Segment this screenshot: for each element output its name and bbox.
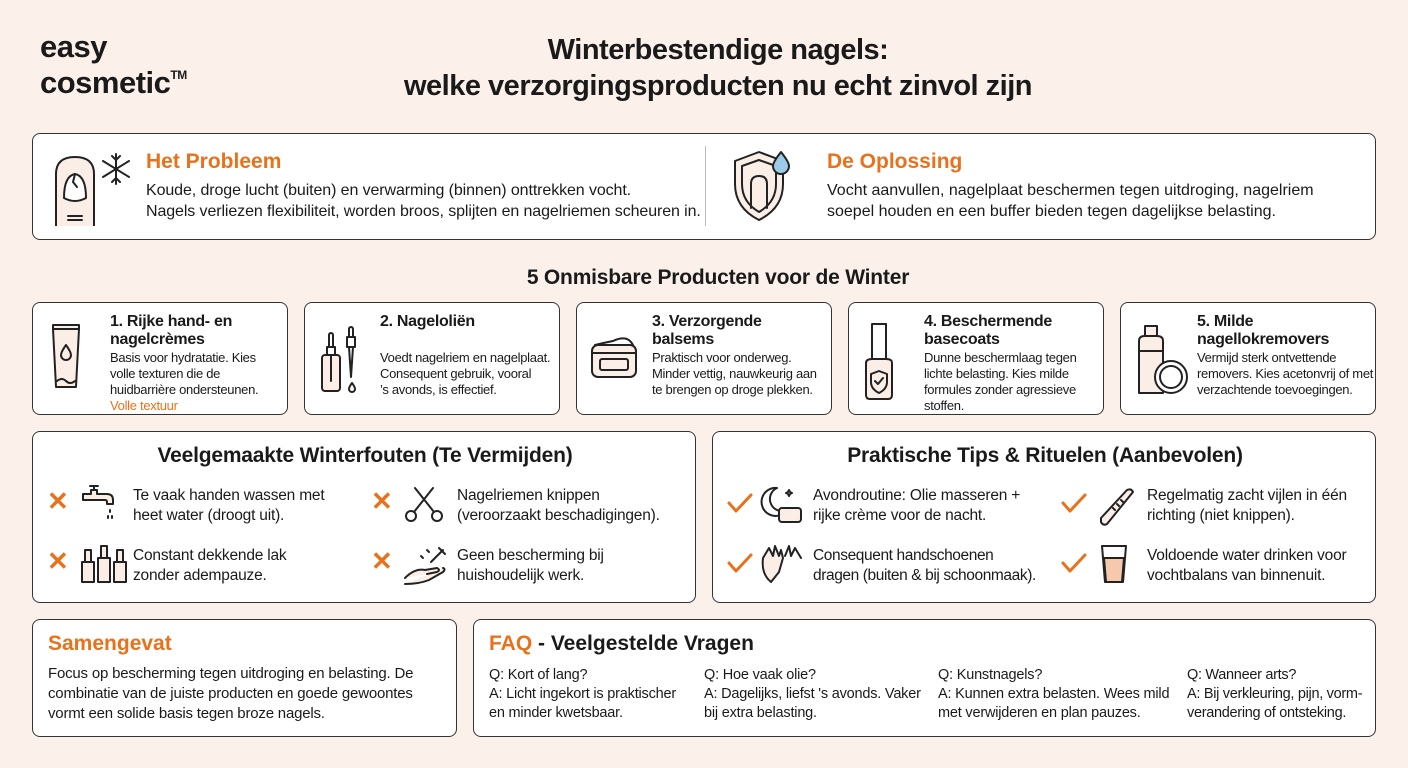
card: product 3: Minder vettig, nauwkeurig aan [652, 366, 817, 381]
faq 1: Q: Kort of lang? [489, 667, 587, 683]
icon: cracked nail [55, 156, 95, 226]
logo: easy [40, 29, 107, 64]
faq 4: verandering of ontsteking. [1187, 705, 1346, 721]
logo: cosmeticTM [40, 65, 187, 100]
text: solution: Vocht aanvullen, nagelplaat beschermen tegen uitdroging, nagelriem [827, 182, 1314, 199]
mistake 1: ✕ [47, 486, 69, 516]
card: product 4: 4. Beschermende [924, 313, 1052, 330]
mistake 1: Te vaak handen wassen met [133, 487, 324, 504]
tip 2: richting (niet knippen). [1147, 507, 1295, 524]
tip 2: Regelmatig zacht vijlen in één [1147, 487, 1347, 504]
card: product 1: Basis voor hydratatie. Kies [110, 350, 256, 365]
mistake 4: Geen bescherming bij [457, 547, 604, 564]
faq 2: A: Dagelijks, liefst 's avonds. Vaker [704, 686, 921, 702]
icon: snowflake [102, 153, 130, 185]
logo [40, 29, 187, 100]
faq 1 [489, 667, 676, 721]
text: problem [146, 182, 701, 220]
icon: balm jar [591, 337, 637, 378]
card: product 1: volle texturen die de [110, 366, 220, 381]
faq 4: A: Bij verkleuring, pijn, vorm- [1187, 686, 1362, 702]
card: product 4: stoffen. [924, 398, 964, 413]
mistake 4 [371, 546, 604, 585]
mistake 2: Nagelriemen knippen [457, 487, 600, 504]
text: problem: Koude, droge lucht (buiten) en verwarming (binnen) onttrekken vocht. [146, 182, 631, 199]
title [404, 34, 1032, 102]
icon: basecoat bottle [865, 323, 893, 400]
mistake 1: heet water (droogt uit). [133, 507, 284, 524]
text: summary [48, 665, 413, 722]
faq 3: Q: Kunstnagels? [938, 667, 1042, 683]
card: product 4 [848, 302, 1104, 415]
card: product 5: 5. Milde [1197, 313, 1253, 330]
mistake 2: ✕ [371, 486, 393, 516]
tip 1 [727, 486, 1020, 524]
icon: oil dropper [321, 326, 356, 393]
card: product 2: ’s avonds, is effectief. [380, 382, 497, 397]
text: summary: combinatie van de juiste producten en goede gewoontes [48, 685, 413, 702]
faq 1: en minder kwetsbaar. [489, 705, 623, 721]
card: product 4: lichte belasting. Kies milde [924, 366, 1069, 381]
tip 4: vochtbalans van binnenuit. [1147, 567, 1325, 584]
heading: mistakes: Veelgemaakte Winterfouten (Te Vermijden) [157, 444, 573, 467]
card: product 5: removers. Kies acetonvrij of met [1197, 366, 1373, 381]
faq 2: Q: Hoe vaak olie? [704, 667, 816, 683]
mistake 4: ✕ [371, 546, 393, 576]
faq 1: A: Licht ingekort is praktischer [489, 686, 676, 702]
faq 2: bij extra belasting. [704, 705, 817, 721]
card: product 4: Dunne beschermlaag tegen [924, 350, 1077, 365]
faq 4 [1187, 667, 1362, 721]
heading: tips: Praktische Tips & Rituelen (Aanbevolen) [847, 444, 1243, 467]
card: product 3 [576, 302, 832, 415]
icon: cream tube [52, 324, 80, 388]
card: product 1: nagelcrèmes [110, 331, 205, 348]
text: summary: Focus op bescherming tegen uitdroging en belasting. De [48, 665, 413, 682]
title: welke verzorgingsproducten nu echt zinvol zijn [404, 70, 1032, 102]
panel: mistakes [32, 431, 696, 603]
mistake 2 [371, 486, 660, 524]
card: product 5: Vermijd sterk ontvettende [1197, 350, 1336, 365]
mistake 3: ✕ [47, 546, 69, 576]
faq 4: Q: Wanneer arts? [1187, 667, 1296, 683]
heading: 5 products: 5 Onmisbare Producten voor de Winter [527, 266, 909, 289]
faq 3 [938, 667, 1169, 721]
tip 4: Voldoende water drinken voor [1147, 547, 1346, 564]
panel: tips [712, 431, 1376, 603]
tip 1: Avondroutine: Olie masseren + [813, 487, 1020, 504]
heading: FAQ: FAQ - Veelgestelde Vragen [489, 632, 754, 655]
tip 3 [727, 545, 1036, 584]
panel: summary [32, 619, 457, 737]
card: product 1 [32, 302, 288, 415]
card: product 3: balsems [652, 331, 714, 348]
mistake 3: Constant dekkende lak [133, 547, 286, 564]
card: product 3: te brengen op droge plekken. [652, 382, 813, 397]
card: product 5: nagellokremovers [1197, 331, 1329, 348]
text: problem: Nagels verliezen flexibiliteit, worden broos, splijten en nagelriemen scheuren in. [146, 203, 701, 220]
card: product 1: 1. Rijke hand- en [110, 313, 232, 330]
card: product 1: Volle textuur [110, 398, 178, 413]
panel: problem and solution [32, 133, 1376, 240]
tip 3: dragen (buiten & bij schoonmaak). [813, 567, 1036, 584]
card: product 5: verzachtende toevoegingen. [1197, 382, 1353, 397]
mistake 2: (veroorzaakt beschadigingen). [457, 507, 660, 524]
mistake 1 [47, 485, 325, 524]
mistake 4: huishoudelijk werk. [457, 567, 584, 584]
icon: shield with drop [734, 151, 790, 221]
card: product 2 [304, 302, 560, 415]
tip 2 [1061, 487, 1347, 526]
heading: het probleem: Het Probleem [146, 150, 281, 173]
text: summary: vormt een solide basis tegen broze nagels. [48, 705, 325, 722]
card: product 4: formules zonder agressieve [924, 382, 1076, 397]
card: product 2: 2. Nageloliën [380, 313, 475, 330]
card: product 1: huidbarrière ondersteunen. [110, 382, 258, 397]
card: product 2: Consequent gebruik, vooral [380, 366, 531, 381]
text: solution: soepel houden en een buffer bieden tegen dagelijkse belasting. [827, 203, 1276, 220]
card: product 5 [1120, 302, 1376, 415]
icon: remover bottle with pad [1138, 325, 1188, 394]
faq 2 [704, 667, 921, 721]
tip 4 [1061, 545, 1346, 584]
mistake 3 [47, 545, 287, 584]
panel: FAQ [473, 619, 1376, 737]
card: product 3: 3. Verzorgende [652, 313, 762, 330]
tip 1: rijke crème voor de nacht. [813, 507, 986, 524]
text: solution [827, 182, 1314, 220]
mistake 3: zonder adempauze. [133, 567, 267, 584]
faq 3: met verwijderen en plan pauzes. [938, 705, 1141, 721]
title: Winterbestendige nagels: [548, 34, 888, 66]
heading: samengevat: Samengevat [48, 632, 172, 655]
tip 3: Consequent handschoenen [813, 547, 993, 564]
faq 3: A: Kunnen extra belasten. Wees mild [938, 686, 1169, 702]
card: product 2: Voedt nagelriem en nagelplaat. [380, 350, 550, 365]
heading: de oplossing: De Oplossing [827, 150, 962, 173]
card: product 3: Praktisch voor onderweg. [652, 350, 791, 365]
card: product 4: basecoats [924, 331, 1000, 348]
